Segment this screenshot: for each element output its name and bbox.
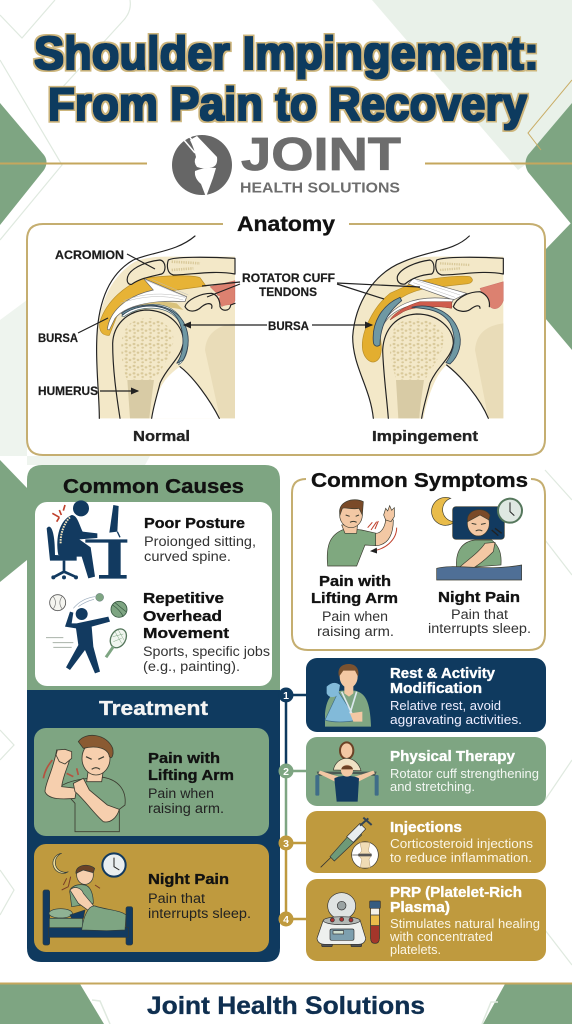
- text: injections: Injections: [390, 820, 462, 836]
- text: PRP: Plasma): [390, 900, 450, 916]
- card: PRP platelet-rich plasma: [306, 879, 546, 961]
- text: pain with lifting arm: Pain with: [319, 573, 391, 590]
- icon: centrifuge and blood tube: [317, 893, 380, 947]
- text: pain with lifting arm: Pain when: [322, 609, 388, 624]
- text: repetitive overhead movement: Sports, specific jobs: [143, 644, 270, 659]
- text: repetitive overhead movement: Repetitive: [143, 590, 224, 607]
- text: PRP: with concentrated: [389, 930, 493, 944]
- text: poor posture: Proionged sitting,: [144, 534, 256, 549]
- card: causes list: [35, 500, 272, 686]
- text: night pain: Pain that: [148, 891, 205, 906]
- text: pain with lifting arm: raising arm.: [148, 801, 224, 816]
- icon: syringe and joint: [321, 818, 378, 868]
- text: night pain: [428, 589, 531, 636]
- label: acromion: ACROMION: [55, 250, 124, 262]
- card: rest and activity modification: [306, 658, 546, 732]
- text: pain with lifting arm: [311, 573, 398, 639]
- heading: anatomy: Anatomy: [237, 213, 335, 236]
- text: pain with lifting arm: [148, 750, 234, 816]
- icon: man lifting arm in pain: [327, 500, 397, 566]
- text: physical therapy: and stretching.: [390, 780, 475, 794]
- panel: treatment: [27, 690, 280, 962]
- text: PRP: PRP (Platelet-Rich: [390, 885, 522, 901]
- panel: common causes: [27, 465, 280, 694]
- label: humerus: HUMERUS: [38, 386, 98, 398]
- text: PRP: [389, 885, 540, 957]
- step 1: 1: [283, 690, 289, 702]
- text: injections: to reduce inflammation.: [390, 851, 532, 865]
- label: rotator cuff tendons: TENDONS: [259, 287, 317, 299]
- text: night pain: Night Pain: [148, 871, 229, 888]
- diagram: impingement shoulder: [353, 236, 503, 418]
- label: bursa centre: BURSA: [268, 321, 309, 333]
- text: night pain: Pain that: [451, 607, 508, 622]
- text: repetitive overhead movement: Movement: [143, 625, 229, 642]
- heading: common causes: Common Causes: [63, 476, 244, 498]
- anatomy labels and leader arrows: [38, 250, 420, 398]
- panel: anatomy: [27, 213, 545, 455]
- text: rest and activity modification: Modification: [390, 681, 482, 697]
- step 1: [278, 688, 294, 702]
- text: rest and activity modification: aggravating activities.: [390, 713, 522, 727]
- tagline: HEALTH SOLUTIONS: [240, 180, 400, 196]
- text: pain with lifting arm: Pain when: [148, 786, 214, 801]
- card: night pain: [34, 844, 269, 952]
- text: injections: Corticosteroid injections: [390, 837, 533, 851]
- wordmark: JOINT: [241, 128, 401, 180]
- text: night pain: interrupts sleep.: [428, 621, 531, 636]
- step 4: 4: [283, 914, 289, 926]
- step 2: 2: [283, 766, 289, 778]
- text: repetitive overhead movement: Overhead: [143, 608, 222, 625]
- card: injections: [306, 811, 546, 873]
- step 2: [278, 764, 294, 778]
- icon: man sitting up in bed: [43, 853, 133, 945]
- step 3: [278, 836, 294, 850]
- text: pain with lifting arm: Lifting Arm: [148, 767, 234, 784]
- title: Shoulder Impingement:: [34, 27, 539, 79]
- text: poor posture: curved spine.: [144, 549, 231, 564]
- icon: person in arm sling: [325, 664, 371, 727]
- step 3: 3: [283, 838, 289, 850]
- icon: poor posture at desk: [47, 500, 127, 579]
- title: From Pain to Recovery: [48, 78, 527, 130]
- text: night pain: interrupts sleep.: [148, 906, 251, 921]
- icon: therapist with resistance bands: [315, 742, 379, 802]
- text: rest and activity modification: [390, 666, 522, 727]
- timeline: treatment steps: [278, 688, 306, 926]
- step 4: [278, 912, 294, 926]
- text: poor posture: [144, 515, 256, 564]
- text: night pain: [148, 871, 251, 921]
- text: pain with lifting arm: Pain with: [148, 750, 220, 767]
- logo: Joint Health Solutions: [172, 128, 401, 197]
- text: rest and activity modification: Rest & Activity: [390, 666, 495, 682]
- text: physical therapy: [390, 749, 539, 794]
- text: pain with lifting arm: raising arm.: [317, 624, 394, 639]
- label: bursa left: BURSA: [38, 333, 78, 345]
- heading: treatment: Treatment: [99, 698, 208, 720]
- caption: impingement: Impingement: [372, 428, 478, 445]
- divider lines beside logo: [0, 162, 572, 164]
- panel: common symptoms: [292, 470, 545, 650]
- heading: common symptoms: Common Symptoms: [311, 470, 528, 492]
- text: pain with lifting arm: Lifting Arm: [311, 590, 398, 607]
- footer text: Joint Health Solutions: [147, 992, 425, 1020]
- text: night pain: Night Pain: [438, 589, 520, 606]
- text: rest and activity modification: Relative rest, avoid: [390, 699, 501, 713]
- text: injections: [390, 820, 533, 865]
- icon: overhead sports movement: [46, 593, 130, 673]
- footer: [0, 984, 572, 1024]
- label: rotator cuff tendons: ROTATOR CUFF: [242, 273, 335, 285]
- text: PRP: platelets.: [390, 943, 441, 957]
- text: repetitive overhead movement: [143, 590, 270, 674]
- text: physical therapy: Rotator cuff strengthening: [390, 767, 539, 781]
- card: physical therapy: [306, 737, 546, 806]
- label: rotator cuff tendons: [242, 273, 335, 299]
- diagram: normal shoulder: [97, 236, 235, 418]
- card: pain with lifting arm: [34, 728, 269, 836]
- icon: man woken by night pain: [432, 497, 522, 580]
- text: repetitive overhead movement: (e.g., painting).: [143, 659, 240, 674]
- text: PRP: Stimulates natural healing: [390, 917, 540, 931]
- caption: normal: Normal: [133, 428, 190, 445]
- icon: man holding shoulder: [43, 735, 125, 832]
- icon: knee joint in circle: [172, 131, 232, 197]
- text: physical therapy: Physical Therapy: [390, 749, 515, 765]
- title: [34, 27, 539, 130]
- text: poor posture: Poor Posture: [144, 515, 245, 532]
